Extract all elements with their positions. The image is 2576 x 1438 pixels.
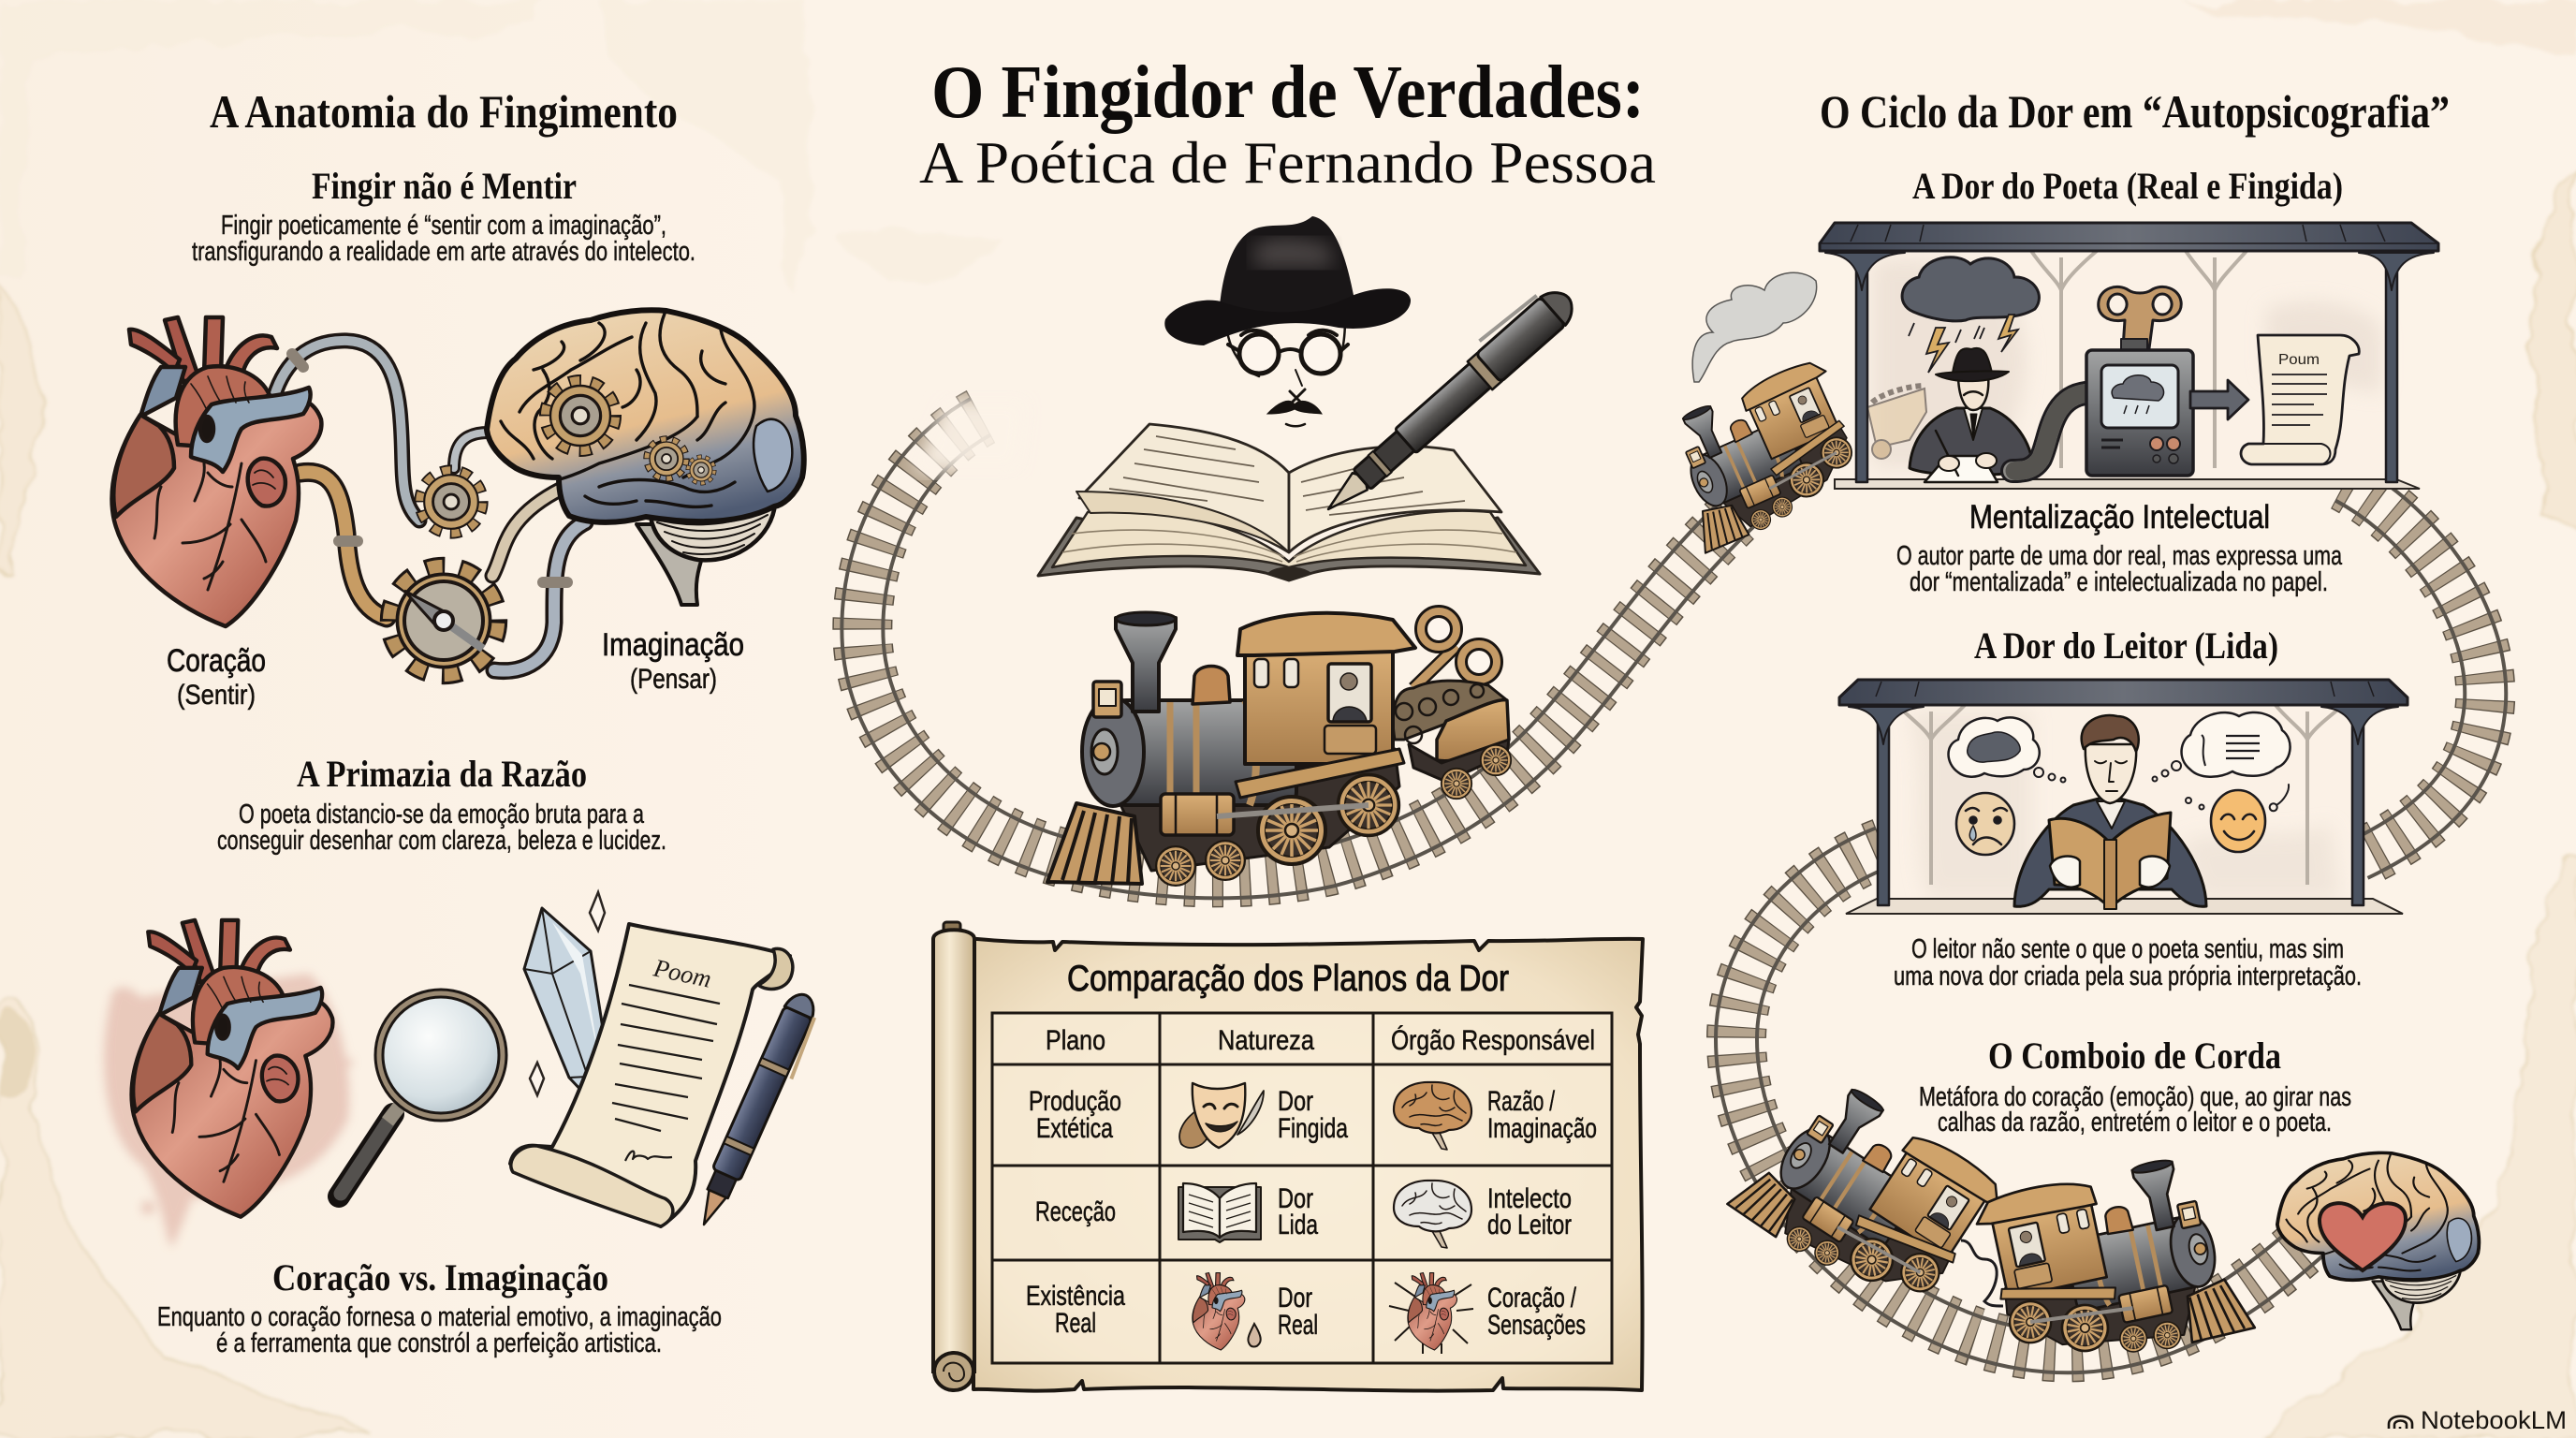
icon: theatre mask and quill (1179, 1083, 1264, 1148)
faded tender behind column (1867, 386, 1926, 459)
table row: Existência Real (1026, 1273, 1586, 1354)
icon: coupling wire (1961, 1240, 2003, 1306)
heading: O Ciclo da Dor em Autopsicografia: O Ciclo da Dor em “Autopsicografia” (1820, 85, 2450, 138)
table row: Produção Extética: Produção (1029, 1086, 1121, 1117)
label: Coração (Sentir): (Sentir) (177, 680, 256, 711)
text: mentalization description: O autor parte de uma dor real, mas expressa uma (1896, 541, 2343, 571)
text: comparison description: Enquanto o coração fornesa o material emotivo, a imaginação (157, 1302, 722, 1332)
icon: sparkles (530, 892, 605, 1095)
text: reader description: uma nova dor criada pela sua própria interpretação. (1894, 961, 2362, 991)
text: reader description (1894, 934, 2362, 991)
illustration: heart, magnifier, crystal, poem and pen (104, 892, 825, 1246)
icon: wind-up machine with screen (2086, 286, 2248, 476)
illustration: small locomotive arriving at station (1650, 355, 1874, 554)
table row: Receção (1035, 1181, 1572, 1248)
table row: Existência Real: Dor (1278, 1283, 1312, 1313)
table row: Receção: Intelecto (1487, 1183, 1572, 1214)
icon: thought bubble with dark cloud (1949, 717, 2065, 783)
label: Imaginação (Pensar) (602, 627, 744, 695)
title: A Poética de Fernando Pessoa (919, 130, 1656, 196)
label: Imaginação (Pensar): (Pensar) (630, 664, 717, 695)
icon: heart (112, 317, 321, 626)
columns and roof (1820, 223, 2438, 482)
panel: railway track S-curve (862, 398, 1741, 877)
text: reader description: O leitor não sente o que o poeta sentiu, mas sim (1911, 934, 2344, 964)
heading: A Dor do Leitor: A Dor do Leitor (Lida) (1974, 624, 2278, 667)
text: mentalization description (1896, 541, 2343, 597)
table row: Existência Real: Sensações (1487, 1310, 1586, 1341)
icon: reader with book (2014, 715, 2206, 909)
columns and roof (1839, 680, 2408, 905)
text: wind-up train description: Metáfora do coração (emoção) que, ao girar nas (1919, 1082, 2351, 1112)
heading: Coração vs. Imaginação: Coração vs. Imaginação (272, 1256, 608, 1299)
table row: Produção Extética (1029, 1082, 1597, 1150)
icon: brown brain (1394, 1082, 1471, 1150)
text: primazia description (217, 800, 666, 856)
table row: Existência Real: Real (1278, 1310, 1318, 1341)
text: fingir description: transfigurando a realidade em arte através do intelecto. (192, 237, 695, 267)
panel: right column, cycle of pain (1650, 85, 2485, 1382)
heading: O Comboio de Corda: O Comboio de Corda (1988, 1034, 2281, 1077)
illustration: two locomotives descending the curve (1726, 1064, 2255, 1382)
icon: open book (1038, 424, 1540, 580)
table header: Natureza (1218, 1025, 1314, 1056)
smoke (1692, 272, 1817, 382)
station interior (1846, 704, 2403, 914)
icon: poem scroll (510, 924, 793, 1226)
icon: finished poem scroll (2241, 335, 2359, 464)
illustration: Pessoa portrait (1164, 216, 1411, 426)
text: primazia description: conseguir desenhar com clareza, beleza e lucidez. (217, 826, 666, 856)
label: Coração (Sentir): Coração (167, 643, 266, 679)
table header (1046, 1025, 1595, 1056)
icon: small open book (1178, 1183, 1261, 1242)
icon: medium gear (421, 472, 481, 532)
table grid (992, 1013, 1612, 1363)
icon: fountain pen (690, 990, 825, 1233)
table row: Receção: Receção (1035, 1196, 1116, 1227)
label: Imaginação (Pensar): Imaginação (602, 627, 744, 663)
table row: Existência Real: Existência (1026, 1281, 1125, 1312)
table row: Produção Extética: Razão / (1487, 1086, 1555, 1117)
table row: Existência Real: Coração / (1487, 1283, 1576, 1313)
table row: Receção: Dor (1278, 1183, 1313, 1214)
icon: heart with nerves (1389, 1273, 1473, 1354)
table row: Produção Extética: Extética (1036, 1113, 1113, 1144)
text: wind-up train description: calhas da razão, entretém o leitor e o poeta. (1938, 1108, 2332, 1137)
table header: Plano (1046, 1025, 1105, 1056)
icon: grey brain (1394, 1181, 1471, 1248)
icon: black fedora hat (1164, 216, 1411, 345)
icon: small heart and drop (1193, 1273, 1261, 1350)
title: O Fingidor de Verdades: (931, 51, 1645, 134)
icon: right-hand track segment (2345, 482, 2485, 859)
icon: fountain pen writing on the book (1310, 278, 1581, 523)
text: primazia description: O poeta distancio-se da emoção bruta para a (239, 800, 645, 829)
illustration: heart connected to brain through pipes and gears (112, 310, 804, 672)
text: mentalization description: dor “mentalizada” e intelectualizada no papel. (1910, 567, 2328, 597)
icon: left locomotive (1726, 1064, 2010, 1330)
illustration: wind-up train on tracks (1047, 611, 1511, 886)
icon: hose from machine to desk (2012, 393, 2086, 471)
text: fingir description: Fingir poeticamente é “sentir com a imaginação”, (221, 211, 666, 241)
icon: lower-left track segment (1736, 847, 2312, 1352)
icon: parchment sheet (973, 939, 1643, 1391)
table header: Órgão Responsável (1391, 1025, 1595, 1056)
table row: Produção Extética: Imaginação (1487, 1113, 1597, 1144)
icon: anatomical heart (132, 920, 332, 1217)
icon: tender wagon (1393, 681, 1511, 799)
icon: large gear with pointer (392, 569, 495, 672)
table row: Produção Extética: Fingida (1278, 1113, 1348, 1144)
panel: left column, anatomy of pretending (104, 85, 825, 1358)
logo: NotebookLM: NotebookLM (2421, 1406, 2567, 1434)
icon: magnifying glass (339, 993, 503, 1196)
icon: locomotive (1047, 612, 1415, 886)
heading: A Dor do Poeta: A Dor do Poeta (Real e Fingida) (1912, 165, 2343, 207)
icon: face with round glasses (1226, 318, 1348, 426)
icon: brain with heart inside (2277, 1152, 2479, 1329)
station interior (1835, 251, 2420, 489)
icon: happy face (2211, 785, 2289, 852)
icon: poet writing at desk (1910, 348, 2033, 482)
table row: Receção: Lida (1278, 1210, 1318, 1240)
text: comparison description: é a ferramenta que constról a perfeição artistica. (216, 1328, 662, 1358)
heading: A Anatomia do Fingimento: A Anatomia do Fingimento (210, 85, 678, 138)
text: poem heading on scroll: Poom (651, 953, 714, 993)
text: fingir description (192, 211, 695, 267)
icon: storm cloud with lightning (1902, 257, 2039, 373)
heading: A Primazia da Razão: A Primazia da Razão (297, 753, 587, 795)
heading: Fingir não é Mentir: Fingir não é Mentir (312, 165, 577, 207)
heading: Comparação dos Planos da Dor: Comparação dos Planos da Dor (1067, 959, 1509, 999)
icon: watercolor splash (104, 974, 353, 1246)
icon: wind-up key (1413, 611, 1497, 688)
title (919, 51, 1656, 196)
table row: Receção: do Leitor (1487, 1210, 1572, 1240)
icon: thought bubble with writing (2153, 712, 2291, 809)
icon: brain with gears (487, 310, 804, 605)
illustration: station one, the poet (1692, 223, 2438, 489)
icon: crystal (524, 908, 608, 1111)
icon: sad face (1956, 793, 2014, 855)
table row: Produção Extética: Dor (1278, 1086, 1313, 1117)
icon: right locomotive (1972, 1149, 2255, 1382)
text: poem label: Poum (2278, 352, 2320, 368)
text: comparison description (157, 1302, 722, 1358)
table row: Existência Real: Real (1055, 1308, 1096, 1339)
panel: comparison table on parchment scroll (933, 922, 1643, 1391)
illustration: station two, the reader (1839, 680, 2408, 914)
icon: scroll roller (933, 922, 974, 1390)
label: Coração (Sentir) (167, 643, 266, 711)
text: wind-up train description (1919, 1082, 2351, 1137)
heading: Mentalização Intelectual: Mentalização Intelectual (1969, 499, 2270, 536)
